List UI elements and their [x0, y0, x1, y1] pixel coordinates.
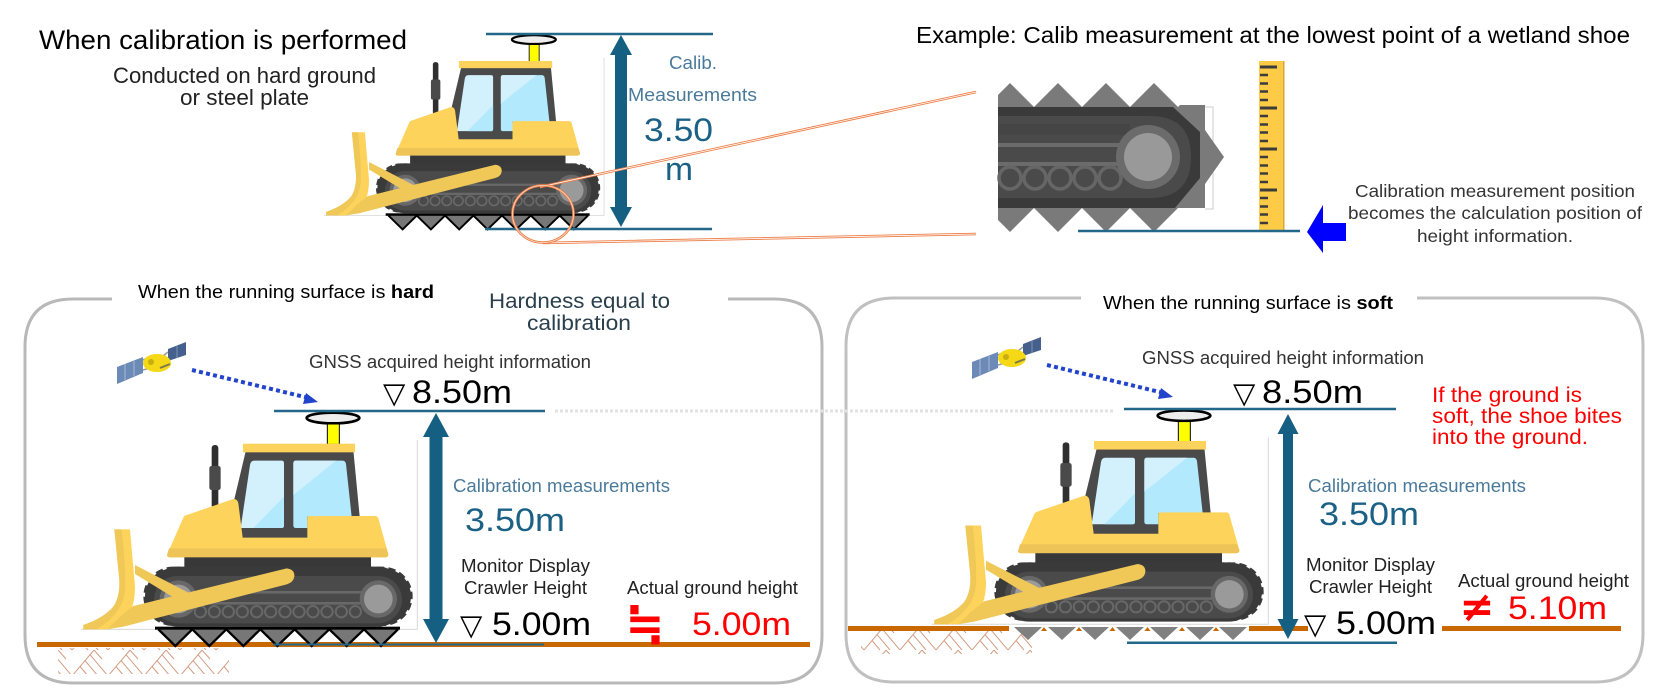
text: actual ground height, hard: 5.00m [692, 606, 791, 642]
bulldozer: hard surface [81, 413, 417, 646]
text: GNSS height, hard: GNSS acquired height information [309, 351, 591, 372]
text: monitor display height, soft: ▽ [1304, 607, 1327, 641]
text: actual ground height, hard: ≒ [625, 596, 665, 652]
text: calibration conditions [113, 63, 376, 110]
text: soft ground note: soft, the shoe bites [1432, 405, 1622, 428]
panel: hard surface [25, 299, 822, 683]
ground: hard [37, 642, 810, 647]
text: GNSS height, hard: 8.50m [412, 374, 512, 410]
text: GNSS height, soft: ▽ [1233, 376, 1256, 410]
arrow: blue pointer [1307, 205, 1346, 253]
text: GNSS height, soft: GNSS acquired height information [1142, 347, 1424, 368]
text: monitor display height, soft: Monitor Display [1306, 554, 1436, 575]
text: calibration conditions: Conducted on hard ground [113, 63, 376, 88]
text: calibration position note: Calibration measurement position [1355, 181, 1635, 201]
panel: track detail [998, 83, 1224, 232]
text: calibration measurement, soft [1308, 475, 1526, 532]
text: actual ground height, hard [625, 577, 798, 652]
text: GNSS height, hard [309, 351, 591, 410]
text: calibration measurements value: Measurements [628, 84, 757, 105]
text: monitor display height, soft: 5.00m [1336, 605, 1436, 641]
height line: top, hard [274, 410, 545, 412]
callout: magnifier lines and circle [512, 92, 976, 243]
text: calibration measurement, hard: Calibration measurements [453, 475, 670, 496]
text: calibration position note: becomes the calculation position of [1348, 203, 1642, 223]
text: hardness equal to calibration: Hardness equal to [489, 290, 670, 313]
icon: satellite with signal, hard panel [117, 342, 318, 404]
text: calibration measurements value: 3.50 [644, 112, 713, 148]
text: calibration measurement, hard: 3.50m [465, 502, 565, 538]
arrow: calibration height [610, 35, 632, 227]
text: calibration position note [1348, 181, 1642, 246]
text: calibration measurements value [628, 52, 757, 187]
text: calibration conditions: or steel plate [180, 85, 309, 110]
panel: soft surface [846, 298, 1643, 682]
dotted connector between panels [555, 410, 1114, 412]
text: actual ground height, hard: Actual ground height [627, 577, 798, 598]
ground hatching: soft [861, 631, 1032, 654]
text: hardness equal to calibration: calibration [527, 312, 631, 335]
bulldozer: calibration [324, 35, 604, 229]
arrow: calibration height, hard [423, 413, 449, 643]
bulldozer: soft surface [932, 410, 1268, 624]
text: monitor display height, hard: 5.00m [492, 606, 591, 642]
text: monitor display height, soft [1304, 554, 1436, 641]
text: GNSS height, soft [1142, 347, 1424, 410]
text: actual ground height, soft: ≠ [1459, 582, 1495, 631]
heading: example: Example: Calib measurement at the lowest point of a wetland shoe [916, 22, 1630, 48]
text: calibration position note: height information. [1417, 226, 1573, 246]
text: calibration measurement, soft: Calibration measurements [1308, 475, 1526, 496]
text: monitor display height, hard: Crawler Height [464, 577, 587, 598]
height line: bottom, hard [273, 644, 544, 646]
text: calibration measurements value: m [665, 151, 693, 187]
text: soft ground note: into the ground. [1432, 426, 1588, 449]
icon: satellite with signal, soft panel [972, 337, 1173, 399]
text: GNSS height, soft: 8.50m [1262, 374, 1363, 410]
text: monitor display height, hard [460, 555, 591, 642]
track shoes sunk in ground [1014, 627, 1247, 640]
text: actual ground height, soft [1458, 570, 1629, 631]
text: actual ground height, soft: Actual ground height [1458, 570, 1629, 591]
text: hardness equal to calibration [489, 290, 670, 335]
text: calibration measurement, soft: 3.50m [1319, 496, 1419, 532]
text: calibration measurements value: Calib. [669, 52, 717, 73]
text: actual ground height, soft: 5.10m [1508, 590, 1607, 626]
ruler [1259, 61, 1284, 231]
text: monitor display height, hard: Monitor Display [461, 555, 591, 576]
text: soft ground note [1432, 384, 1622, 449]
arrow: calibration height, soft [1278, 414, 1298, 639]
ground hatching: hard [58, 648, 229, 674]
text: monitor display height, hard: ▽ [460, 608, 483, 642]
measurement line: shoe lowest point [1078, 230, 1300, 232]
text: GNSS height, hard: ▽ [383, 376, 406, 410]
title: when calibration is performed: When calibration is performed [39, 25, 407, 55]
ground: soft [848, 626, 1621, 631]
text: calibration measurement, hard [453, 475, 670, 538]
text: monitor display height, soft: Crawler Height [1309, 576, 1432, 597]
height line: bottom, soft [1127, 641, 1397, 644]
height line: top, soft [1124, 408, 1396, 410]
heading: soft surface: When the running surface is soft [1103, 292, 1393, 313]
heading: hard surface: When the running surface is hard [138, 281, 434, 302]
measurement lines: calibration [485, 34, 713, 229]
text: soft ground note: If the ground is [1432, 384, 1582, 407]
